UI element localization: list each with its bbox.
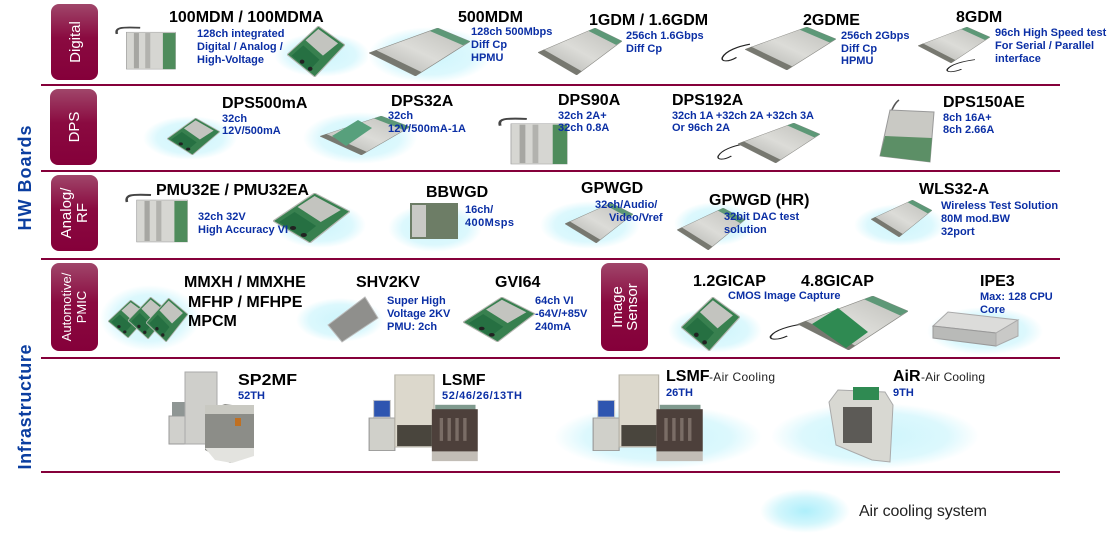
- product: GVI64: [463, 274, 588, 342]
- product: PMU32E / PMU32EA: PMU32E / PMU32EA: [156, 182, 309, 199]
- category tab: Analog/RF: RF: [74, 203, 91, 223]
- product: PMU32E / PMU32EA: 32ch 32V: [198, 211, 246, 223]
- product: DPS500mA: DPS500mA: [222, 95, 308, 112]
- product: 1GDM / 1.6GDM: 256ch 1.6Gbps: [626, 30, 704, 42]
- product: 4.8GICAP: 4.8GICAP: [801, 273, 874, 290]
- product: IPE3: Core: [980, 304, 1005, 316]
- category tab: Analog/RF: Analog/: [58, 187, 75, 238]
- product: MMXH / MFHP / MPCM: MMXH / MMXHE: [184, 274, 306, 291]
- product: WLS32-A: 32port: [941, 226, 975, 238]
- system: AiR Air Cooling: -Air Cooling: [921, 370, 985, 384]
- product: GVI64: 240mA: [535, 321, 571, 333]
- category tab: DPS: [50, 89, 97, 165]
- product: DPS150AE: 8ch 16A+: [943, 112, 992, 124]
- product: DPS32A: [303, 93, 466, 164]
- category tab: Digital: Digital: [67, 21, 84, 63]
- product: SHV2KV: Voltage 2KV: [387, 308, 451, 320]
- system: LSMF Air Cooling: 26TH: [666, 387, 693, 399]
- product: 4.8GICAP: CMOS Image Capture: [728, 290, 840, 302]
- product: DPS500mA: 12V/500mA: [222, 125, 281, 137]
- product: DPS192A: Or 96ch 2A: [672, 122, 730, 134]
- product: DPS192A: 32ch 1A +32ch 2A +32ch 3A: [672, 110, 814, 122]
- product: GPWGD (HR): solution: [724, 224, 767, 236]
- product: SHV2KV: SHV2KV: [356, 274, 420, 291]
- product: 1.2GICAP: 1.2GICAP: [693, 273, 766, 290]
- system: AiR Air Cooling: AiR: [893, 368, 921, 385]
- product: IPE3: IPE3: [980, 273, 1015, 290]
- product: 1GDM / 1.6GDM: Diff Cp: [626, 43, 662, 55]
- side label: HW Boards: HW Boards: [15, 126, 35, 230]
- product: 2GDME: [722, 12, 909, 70]
- legend: air cooling system: [760, 489, 987, 533]
- product: DPS500mA: [143, 95, 308, 160]
- product: DPS32A: DPS32A: [391, 93, 454, 110]
- system: SP2MF: [169, 372, 297, 463]
- product: BBWGD: 400Msps: [465, 217, 514, 229]
- category tab: Automotive/PMIC: Automotive/: [59, 272, 74, 341]
- product: GPWGD: GPWGD: [581, 180, 643, 197]
- panel: row dividers: [41, 84, 1060, 473]
- product: MMXH / MFHP / MPCM: MPCM: [188, 313, 237, 330]
- product: GVI64: 64ch VI: [535, 295, 574, 307]
- product: WLS32-A: WLS32-A: [919, 181, 990, 198]
- system: LSMF Air Cooling: LSMF: [666, 368, 710, 385]
- product: 8GDM: interface: [995, 53, 1041, 65]
- product: 500MDM: 128ch 500Mbps: [471, 26, 552, 38]
- product: DPS150AE: DPS150AE: [943, 94, 1025, 111]
- product: GVI64: -64V/+85V: [535, 308, 588, 320]
- product: 2GDME: 256ch 2Gbps: [841, 30, 909, 42]
- product: 2GDME: 2GDME: [803, 12, 860, 29]
- system: LSMF: LSMF: [442, 372, 486, 389]
- product: WLS32-A: [854, 181, 1058, 246]
- product: WLS32-A: 80M mod.BW: [941, 213, 1011, 225]
- product: DPS192A: [672, 92, 820, 163]
- product: DPS150AE: [880, 94, 1025, 162]
- side label: Infrastructure: Infrastructure: [15, 344, 35, 470]
- product: GPWGD: [540, 180, 663, 249]
- product: BBWGD: 16ch/: [465, 204, 493, 216]
- product: WLS32-A: Wireless Test Solution: [941, 200, 1058, 212]
- system: AiR Air Cooling: [771, 368, 985, 469]
- product: 100MDM / 100MDMA: Digital / Analog /: [197, 41, 283, 53]
- product: PMU32E / PMU32EA: [127, 182, 366, 248]
- legend: air cooling system: Air cooling system: [859, 503, 987, 520]
- category tab: Analog/RF: [51, 175, 98, 251]
- product: 500MDM: 500MDM: [458, 9, 523, 26]
- product: 1.2GICAP: [668, 273, 766, 353]
- product: SHV2KV: [296, 274, 451, 342]
- product: 1GDM / 1.6GDM: 1GDM / 1.6GDM: [589, 12, 708, 29]
- system: AiR Air Cooling: 9TH: [893, 387, 914, 399]
- product: 100MDM / 100MDMA: 128ch integrated: [197, 28, 284, 40]
- product: GPWGD (HR): [674, 192, 809, 250]
- product: IPE3: [927, 273, 1053, 355]
- product: MMXH / MFHP / MPCM: MFHP / MFHPE: [188, 294, 303, 311]
- product: BBWGD: BBWGD: [426, 184, 488, 201]
- product: GPWGD: 32ch/Audio/: [595, 199, 657, 211]
- product: GVI64: GVI64: [495, 274, 540, 291]
- system: SP2MF: 52TH: [238, 390, 265, 402]
- product: MMXH / MFHP / MPCM: [100, 274, 306, 351]
- product: 500MDM: Diff Cp: [471, 39, 507, 51]
- product: SHV2KV: Super High: [387, 295, 446, 307]
- product: 1GDM / 1.6GDM: [538, 12, 708, 75]
- product: DPS32A: 12V/500mA-1A: [388, 123, 466, 135]
- product: 500MDM: HPMU: [471, 52, 503, 64]
- product: DPS90A: DPS90A: [558, 92, 621, 109]
- category tab: Automotive/PMIC: PMIC: [74, 291, 89, 323]
- category tab: Image Sensor: Image: [609, 286, 626, 328]
- product: 8GDM: For Serial / Parallel: [995, 40, 1094, 52]
- product: DPS32A: 32ch: [388, 110, 413, 122]
- product: 8GDM: [918, 9, 1107, 72]
- product: DPS192A: DPS192A: [672, 92, 744, 109]
- category tab: Digital: [51, 4, 98, 80]
- product: DPS90A: 32ch 0.8A: [558, 122, 609, 134]
- system: LSMF Air Cooling: -Air Cooling: [709, 370, 775, 384]
- system: LSMF: 52/46/26/13TH: [442, 390, 522, 402]
- product: DPS150AE: 8ch 2.66A: [943, 124, 994, 136]
- category tab: Image Sensor: Sensor: [624, 283, 641, 331]
- category tab: DPS: DPS: [66, 112, 83, 142]
- product: 500MDM: [368, 9, 552, 83]
- product: 2GDME: HPMU: [841, 55, 873, 67]
- product: 8GDM: 8GDM: [956, 9, 1002, 26]
- product: GPWGD (HR): 32bit DAC test: [724, 211, 800, 223]
- product: 4.8GICAP: [728, 273, 908, 350]
- product: 100MDM / 100MDMA: [117, 9, 370, 77]
- product: DPS90A: 32ch 2A+: [558, 110, 607, 122]
- product: GPWGD: Video/Vref: [609, 212, 663, 224]
- category tab: Image Sensor: [601, 263, 648, 351]
- system: LSMF Air Cooling: [554, 368, 775, 469]
- product: DPS500mA: 32ch: [222, 113, 247, 125]
- product: 100MDM / 100MDMA: 100MDM / 100MDMA: [169, 9, 324, 26]
- product: 8GDM: 96ch High Speed test: [995, 27, 1107, 39]
- system: LSMF: [369, 372, 522, 461]
- product: PMU32E / PMU32EA: High Accuracy VI: [198, 224, 288, 236]
- product: 100MDM / 100MDMA: High-Voltage: [197, 54, 264, 66]
- category tab: Automotive/PMIC: [51, 263, 98, 351]
- product: BBWGD: [388, 184, 514, 252]
- product: GPWGD (HR): GPWGD (HR): [709, 192, 809, 209]
- system: SP2MF: SP2MF: [238, 372, 297, 389]
- product: SHV2KV: PMU: 2ch: [387, 321, 437, 333]
- product: IPE3: Max: 128 CPU: [980, 291, 1053, 303]
- product: 2GDME: Diff Cp: [841, 43, 877, 55]
- product: DPS90A: [500, 92, 621, 164]
